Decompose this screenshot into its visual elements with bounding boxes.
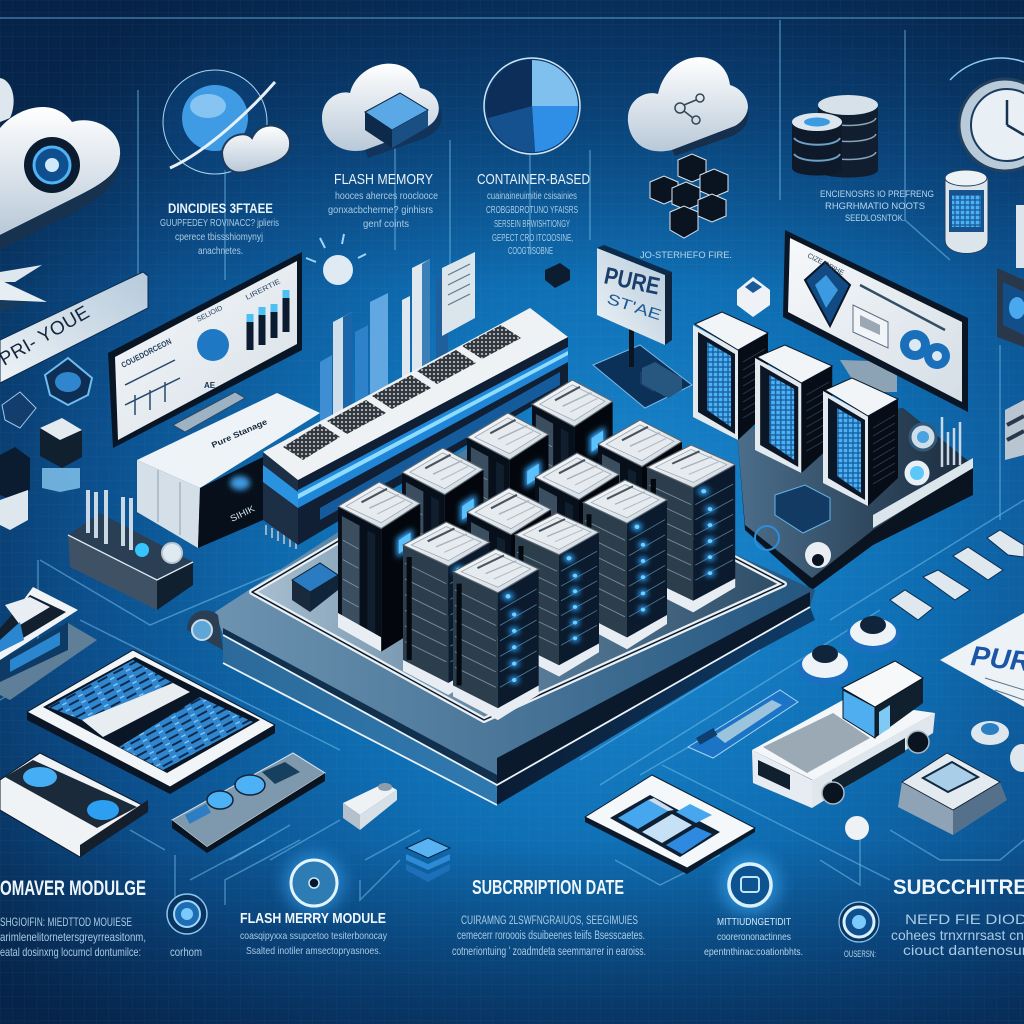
monitor: left: LIRERTIE: [245, 278, 282, 302]
white machine: Pure Stanage: [210, 417, 269, 450]
monitor: left: SELIOID: [196, 305, 224, 324]
text: mitigation: epentnthinac:coationbhts.: [704, 946, 803, 958]
text: flash memory module: FLASH MERRY MODULE: [240, 910, 386, 927]
memory tray: [27, 650, 275, 794]
text: disciplines: cperece tbissshiomynyj: [175, 232, 263, 243]
text: container-based: CONTAINER-BASED: [477, 171, 590, 188]
text: flash memory: hooces aherces rooclooce: [335, 191, 438, 202]
icon: cubes: [650, 154, 728, 238]
text: driver module: OMAVER MODULGE: [0, 877, 146, 900]
text: flash memory: [328, 171, 438, 230]
icon: plane: [0, 265, 47, 312]
icon: glow ring right: [720, 855, 780, 915]
icon: globe and cloud: [163, 70, 290, 174]
text: flash memory module: Ssalted inotiler amsectopryasnoes.: [246, 945, 381, 957]
text: subscription right: [891, 876, 1024, 958]
text: container-based: [477, 171, 590, 257]
text: container-based: GEPECT CRO ITCOOSINE,: [492, 233, 573, 244]
icon: pie chart: [484, 58, 580, 154]
text: driver module: SHGIOIFIN: MIEDTTOD MOUIESE: [0, 915, 132, 929]
text: subscription right: ciouct dantenosur: [903, 942, 1024, 958]
text: cube caption: JO-STERHEFO FIRE.: [640, 250, 732, 260]
icon: cylinders: [945, 170, 1024, 268]
icon: usb key: [343, 783, 397, 830]
tablet center: [585, 775, 755, 874]
white machine: SIHIK: [228, 503, 256, 524]
icon: ring badge: [839, 902, 879, 942]
icon: left cloud: [0, 78, 120, 250]
text: subscription date: cotneriontuing ' zoadmdeta seemmarrer in earoiss.: [452, 946, 646, 958]
banner: [0, 272, 148, 383]
text: subscription date: [452, 877, 646, 958]
bottom-left device: top board: [0, 587, 97, 700]
icon: truck: [752, 661, 935, 808]
monitor: left: [108, 252, 302, 448]
text: disciplines: [160, 201, 279, 257]
text: database caption: RHGRHMATIO NOOTS: [825, 201, 925, 211]
icon: white cloud: [628, 57, 748, 156]
pure storage sign: [545, 245, 770, 408]
text: disciplines: GUUPFEDEY ROVINACC? jplieris: [160, 218, 279, 229]
server towers: [338, 380, 735, 720]
icon: clock: [950, 58, 1024, 171]
text: database caption: [820, 189, 934, 223]
flash array: [263, 308, 568, 549]
text: flash memory: FLASH MEMORY: [334, 171, 433, 188]
text: database caption: ENCIENOSRS IO PREFRENG: [820, 189, 934, 199]
text: mitigation: MITTIUDNGETIDIT: [717, 916, 791, 928]
text: container-based: COOGTISOBNE: [508, 246, 553, 257]
monitor: left: AE: [204, 381, 216, 390]
text: oversign: OUSERSN:: [844, 949, 876, 959]
right edge monitor and drawers: [997, 268, 1024, 460]
text: driver module: [0, 877, 146, 959]
white machine: [137, 393, 320, 548]
icon: database stacks: [792, 95, 878, 178]
pure storage sign: ST'AE: [605, 291, 663, 324]
text: database caption: SEEDLOSNTOK.: [845, 213, 905, 223]
left pedestal: [68, 490, 193, 610]
monitor: right: [783, 230, 968, 412]
icon: connector stick: [688, 690, 798, 758]
text: flash memory: genf coints: [363, 219, 409, 230]
text: container-based: CROBGBDROTUNO YFAISRS: [486, 205, 578, 216]
tablet device: [0, 753, 148, 857]
right platform: [737, 408, 973, 590]
small connectors: [890, 530, 1024, 620]
central platform: [187, 440, 815, 805]
text: corhom: corhom: [170, 945, 202, 959]
card: PURE: [940, 613, 1024, 707]
text: disciplines: anachnetes.: [198, 246, 243, 257]
text: subscription right: NEFD FIE DIOD: [905, 911, 1024, 927]
text: subscription date: CUIRAMNG 2LSWFNGRAIUOS, SEEGIMUIES: [461, 915, 638, 927]
monitor: left: COUEDORCEON: [120, 337, 173, 370]
icon: small ring left: [167, 894, 207, 934]
text: flash memory: gonxacbcherme? ginhisrs: [328, 205, 433, 216]
text: subscription date: cemecerr rorooois dsuibeenes teiifs Bsesscaetes.: [457, 930, 645, 942]
text: driver module: arimlenelitornetersgreyrreasitonm,: [0, 930, 146, 944]
server racks: right trio: [693, 312, 898, 506]
icon: round pads: [798, 616, 1024, 840]
text: subscription date: SUBCRRIPTION DATE: [472, 877, 624, 899]
text: mitigation: [704, 916, 803, 958]
bars: [306, 234, 475, 425]
text: driver module: eatal dosinxng locumcl dontumilce:: [0, 945, 141, 959]
icon: layered stack: [406, 838, 450, 882]
icon: glow ring: [284, 853, 344, 913]
text: flash memory module: [240, 910, 388, 957]
circuit board: [172, 753, 325, 853]
icon: small left gadgets: [0, 358, 92, 530]
text: mitigation: coorerononactinnes: [717, 931, 791, 943]
icon: white box: [898, 753, 1007, 835]
text: container-based: SERSEIN BRWISHTIONGY: [494, 219, 570, 230]
text: subscription right: cohees trnxrnrsast cnl: [891, 927, 1024, 943]
text: disciplines: DINCIDIES 3FTAEE: [168, 201, 273, 216]
monitor: right: CIZE GRIHE: [806, 253, 845, 277]
icon: cloud with chip: [322, 64, 442, 158]
pure storage sign: PURE: [602, 262, 662, 301]
text: flash memory module: coasqipyxxa ssupcetoo tesiterbonocay: [240, 930, 388, 942]
text: container-based: cuainaineuimitie csisainies: [487, 191, 577, 202]
